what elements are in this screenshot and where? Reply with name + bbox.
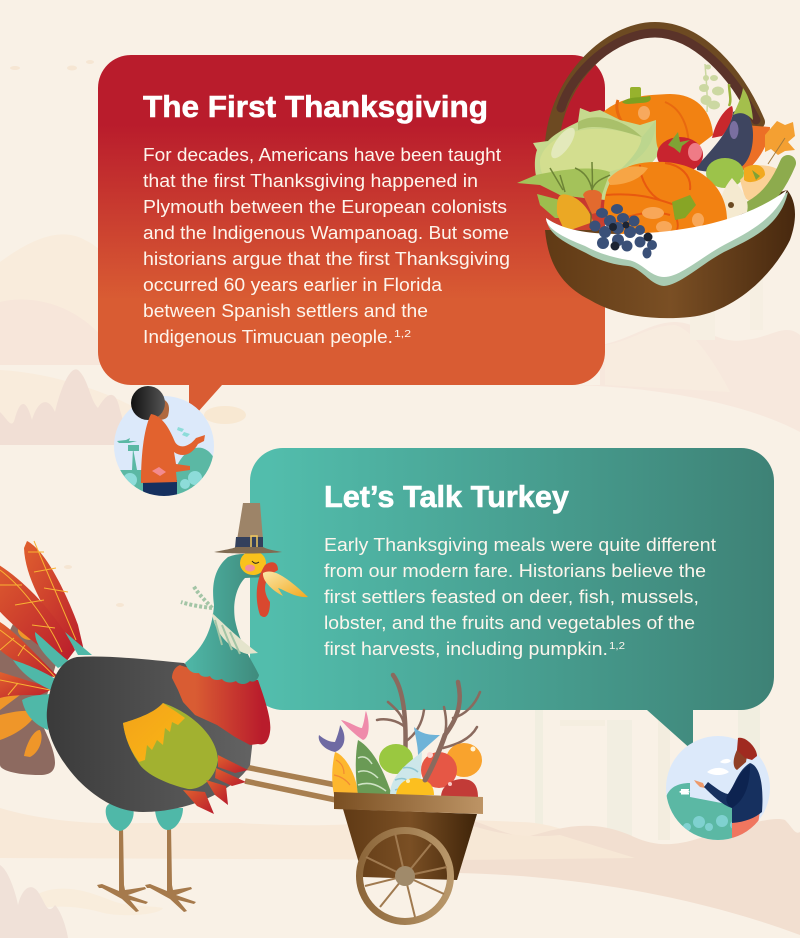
text block: first Thanksgiving history: Indigenous Timucuan people. (143, 327, 393, 347)
cart rim (334, 792, 483, 814)
antlers (377, 675, 480, 760)
text block: first Thanksgiving history: between Spanish settlers and the (143, 301, 428, 321)
icon: person with beard (660, 736, 770, 845)
scarf (181, 585, 258, 654)
napkin (546, 190, 788, 286)
icon: cart with harvest (319, 675, 483, 922)
rear pumpkin (600, 87, 713, 160)
beak (263, 571, 308, 597)
panel: Let's Talk Turkey speech bubble (250, 448, 774, 751)
red breast feathers (172, 665, 270, 745)
text block: early meals: from our modern fare. Historians believe the (324, 561, 706, 581)
text block: first Thanksgiving history: For decades, Americans have been taught (143, 145, 501, 165)
panel: The First Thanksgiving speech bubble (98, 55, 605, 422)
cart box (343, 809, 477, 880)
text block: early meals (324, 535, 716, 659)
text block: early meals: first harvests, including pumpkin. (324, 639, 608, 659)
icon: vegetable basket (517, 29, 795, 318)
antler over fruit (425, 735, 445, 780)
pilgrim hat (214, 503, 282, 554)
gourd (740, 165, 781, 205)
text block: first Thanksgiving history: historians argue that the first Thanksgiving (143, 249, 510, 269)
apple (706, 158, 744, 188)
heading: The First Thanksgiving: The First Thanksgiving (143, 89, 488, 124)
icon: person with dark hair (114, 386, 215, 500)
plant sprig (699, 64, 724, 112)
face (240, 551, 266, 575)
icon: turkey with pilgrim hat (0, 503, 336, 912)
wing (123, 703, 218, 789)
pear (720, 178, 748, 222)
heading: Let's Talk Turkey: Let’s Talk Turkey (324, 479, 570, 514)
cabbage (517, 108, 661, 218)
carrot and maple leaf (740, 121, 795, 172)
cart handles (245, 767, 336, 800)
tail-end red feathers (183, 755, 248, 814)
text block: early meals: first settlers feasted on deer, fish, mussels, (324, 587, 699, 607)
tail feathers (0, 541, 92, 730)
yellow pepper (744, 165, 765, 182)
text block: first Thanksgiving history (143, 145, 510, 347)
basket handle (552, 29, 758, 142)
tomato (657, 132, 703, 173)
tail fan (0, 620, 60, 775)
wheel (360, 830, 450, 922)
small carrot and yellow gourd (550, 162, 610, 232)
text block: early meals: 1,2 (609, 641, 625, 652)
text block: first Thanksgiving history: and the Indigenous Wampanoag. But some (143, 223, 509, 243)
wattle (257, 562, 278, 617)
cucumber (752, 163, 788, 208)
legs and feet (97, 802, 196, 912)
grapes (590, 204, 657, 258)
basket body (545, 190, 795, 318)
text block: first Thanksgiving history: occurred 60 years earlier in Florida (143, 275, 443, 295)
eggplant (697, 88, 753, 172)
text block: first Thanksgiving history: that the first Thanksgiving happened in (143, 171, 478, 191)
text block: early meals: Early Thanksgiving meals were quite different (324, 535, 716, 555)
turkey body (47, 657, 255, 812)
text block: early meals: lobster, and the fruits and vegetables of the (324, 613, 695, 633)
text block: first Thanksgiving history: Plymouth between the European colonists (143, 197, 507, 217)
front pumpkin (604, 162, 727, 240)
fish (319, 711, 440, 795)
neck and head (185, 554, 267, 684)
fruit (396, 743, 482, 798)
text block: first Thanksgiving history: 1,2 (394, 329, 412, 340)
chili pepper (712, 106, 733, 138)
